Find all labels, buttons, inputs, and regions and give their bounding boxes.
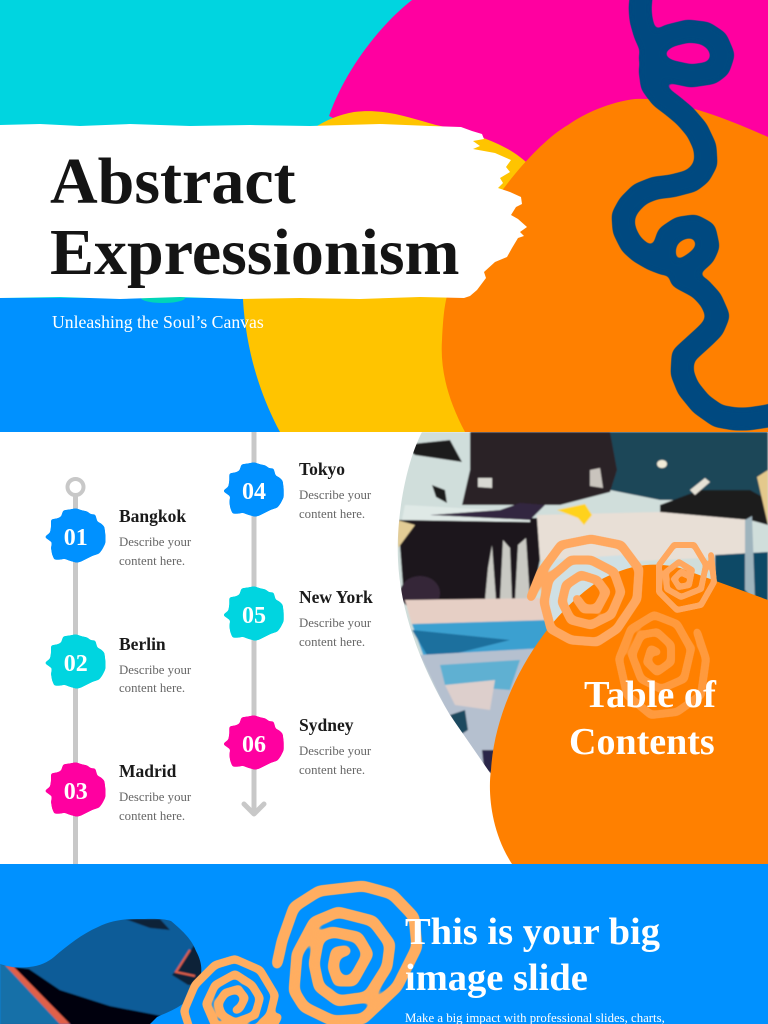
white brush banner: [0, 124, 527, 299]
blue background: [0, 864, 768, 1024]
item 02: [46, 634, 192, 695]
spiral decoration small: [184, 959, 278, 1024]
left timeline line: [68, 479, 84, 864]
item 04: Describe your: [299, 488, 372, 502]
item 06: Sydney: [299, 715, 354, 735]
spiral decoration 3: [619, 615, 706, 715]
subtitle: Unleashing the Soul’s Canvas: [52, 312, 264, 332]
heading: Contents: [569, 721, 715, 763]
item 04: content here.: [299, 507, 365, 521]
item 03: content here.: [119, 809, 185, 823]
item 04: [224, 462, 371, 518]
spiral decoration 1: [531, 539, 639, 642]
panel: title slide: [0, 0, 768, 432]
item 06: Describe your: [299, 744, 372, 758]
item 01: content here.: [119, 554, 185, 568]
title: Expressionism: [50, 216, 460, 289]
heading: This is your big: [405, 911, 660, 953]
item 06: 06: [242, 732, 266, 758]
item 02: Berlin: [119, 634, 166, 654]
navy squiggle: [623, 0, 768, 419]
item 05: 05: [242, 603, 266, 629]
orange shape: [442, 99, 768, 432]
item 01: Bangkok: [119, 506, 186, 526]
item 03: 03: [64, 779, 88, 805]
title: Abstract: [50, 145, 296, 218]
item 04: Tokyo: [299, 459, 345, 479]
item 03: Madrid: [119, 761, 177, 781]
spiral decoration 2: [659, 545, 714, 610]
item 01: Describe your: [119, 535, 192, 549]
panel: big image slide: [0, 864, 768, 1024]
item 03: Describe your: [119, 790, 192, 804]
item 05: Describe your: [299, 616, 372, 630]
item 06: content here.: [299, 763, 365, 777]
image blob: [0, 915, 210, 1024]
magenta shape: [329, 0, 768, 162]
orange blob: [490, 565, 768, 864]
cyan sliver: [141, 297, 185, 303]
heading: Table of: [584, 674, 717, 716]
item 01: 01: [64, 525, 88, 551]
item 02: content here.: [119, 681, 185, 695]
heading: image slide: [405, 957, 588, 999]
white background: [0, 432, 768, 864]
item 06: [224, 715, 372, 777]
cyan background: [0, 0, 412, 298]
item 03: [46, 761, 192, 823]
item 05: [224, 587, 373, 649]
item 05: New York: [299, 587, 373, 607]
item 02: Describe your: [119, 663, 192, 677]
item 04: 04: [242, 479, 266, 505]
item 05: content here.: [299, 635, 365, 649]
item 02: 02: [64, 651, 88, 677]
yellow shape: [243, 111, 526, 432]
abstract painting: [390, 432, 768, 790]
blue shape: [0, 298, 290, 432]
spiral decoration large: [277, 886, 417, 1021]
right timeline arrow: [244, 432, 264, 814]
panel: table of contents: [0, 432, 768, 864]
item 01: [46, 506, 192, 568]
